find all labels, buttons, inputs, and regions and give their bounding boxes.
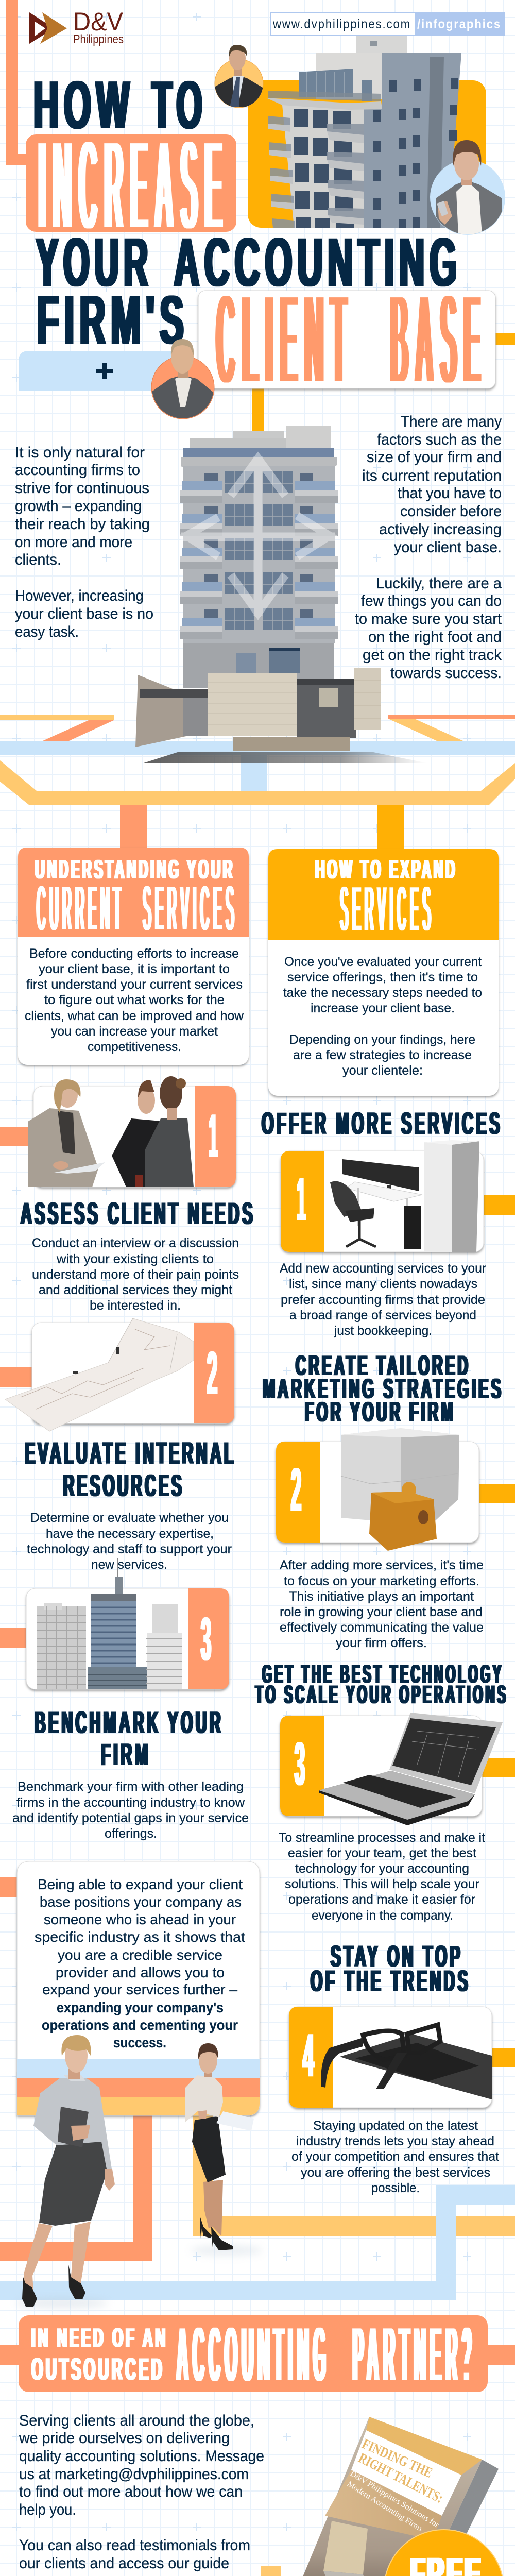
card: strategy 2 puzzle image (276, 1428, 515, 1551)
title: YOUR ACCOUNTING (36, 224, 462, 301)
intro text left: growth – expanding (15, 498, 142, 515)
text: contact invitation: You can also read testimonials from (19, 2537, 250, 2554)
text: create tailored marketing strategies: effectively communicating the value (280, 1620, 484, 1635)
text: evaluate internal resources: technology and staff to support your (27, 1542, 232, 1556)
intro text right: There are many (401, 413, 502, 430)
text: stay on top of the trends: industry trends lets you stay ahead (296, 2134, 494, 2148)
text: assess client needs: Conduct an interview or a discussion (32, 1236, 239, 1250)
text: evaluate internal resources: have the necessary expertise, (46, 1527, 214, 1541)
text: get the best technology (279, 1831, 485, 1923)
text: benchmark your firm: firms in the accounting industry to know (16, 1795, 245, 1810)
text: stay on top of the trends: Staying updated on the latest (313, 2119, 478, 2133)
icon: translucent expansion arrows over building (181, 456, 335, 616)
logo: D&V Philippines (29, 7, 124, 46)
intro text right: actively increasing (379, 521, 502, 538)
card: strategy 4 smart glasses image: 4 (303, 2021, 314, 2090)
text: benchmark your firm (12, 1780, 249, 1841)
text: get the best technology: everyone in the company. (312, 1908, 453, 1923)
heading: stay on top of the trends (311, 1940, 471, 1998)
text: assess client needs: and additional services they might (39, 1283, 232, 1297)
card: step 2 evaluate internal resources image: 2 (207, 1339, 217, 1408)
building backdrop panel (248, 80, 486, 228)
heading: benchmark your firm (35, 1705, 224, 1772)
intro text left (15, 444, 153, 640)
text: contact invitation: Serving clients all around the globe, (19, 2412, 254, 2429)
panel: closing statement: specific industry as it shows that (35, 1929, 245, 1945)
panel: how to expand services: your clientele: (342, 1063, 423, 1078)
text: assess client needs: understand more of their pain points (32, 1267, 239, 1282)
heading: create tailored marketing strategies (263, 1349, 504, 1428)
text: contact invitation: us at marketing@dvphilippines.com (19, 2466, 249, 2483)
card: strategy 4 smart glasses image (289, 2007, 515, 2108)
panel: understanding your current services: your client base, it is important to (39, 962, 230, 976)
heading: benchmark your firm: FIRM (101, 1737, 151, 1772)
intro text left: strive for continuous (15, 480, 149, 497)
text: TO (152, 67, 207, 143)
connector lines below building (0, 715, 515, 850)
text: evaluate internal resources (27, 1511, 232, 1572)
illustration: main building with stone podium (135, 426, 427, 763)
text: assess client needs: be interested in. (90, 1298, 181, 1313)
text: contact invitation: we pride ourselves on delivering (19, 2430, 230, 2447)
title: HOW TO: HOW (33, 67, 134, 143)
heading: evaluate internal resources (25, 1436, 236, 1503)
connector paths to call-to-action (0, 1877, 515, 2300)
text: contact invitation: quality accounting solutions. Message (19, 2448, 264, 2465)
panel: closing statement: expanding your company's (57, 1999, 224, 2015)
panel: closing statement: expand your services further – (42, 1981, 237, 1997)
intro text right: to make sure you start (355, 611, 502, 628)
call to action banner: OUTSOURCED (31, 2352, 165, 2386)
intro text left: easy task. (15, 623, 79, 640)
person: businesswoman holding tablet (15, 2035, 115, 2308)
person: businessman with tie (215, 45, 263, 108)
title: YOUR ACCOUNTING: YOUR (36, 224, 153, 301)
panel: closing statement: you are a credible service (58, 1947, 222, 1963)
text: get the best technology: solutions. This will help scale your (285, 1877, 479, 1891)
heading: get the best technology (255, 1659, 508, 1709)
panel: how to expand services (268, 849, 499, 1096)
card: step 1 assess client needs image (0, 1076, 236, 1187)
intro text right: consider before (400, 503, 502, 520)
text: evaluate internal resources: Determine or evaluate whether you (30, 1511, 229, 1525)
text: create tailored marketing strategies: to focus on your marketing efforts. (284, 1574, 479, 1588)
panel: understanding your current services: to figure out what works for the (44, 993, 225, 1007)
title: INCREASE in orange box (26, 111, 236, 259)
intro text left: clients. (15, 551, 61, 568)
text: create tailored marketing strategies: This initiative plays an important (289, 1589, 474, 1604)
illustration: filing cabinet, desk and chair (330, 1140, 479, 1252)
intro text left: on more and more (15, 534, 132, 551)
title: FIRM'S: FIRM'S (37, 282, 189, 359)
intro text right: your client base. (394, 539, 502, 556)
person: businesswoman holding papers (185, 2043, 263, 2256)
illustration: puzzle cube with gold piece (341, 1428, 459, 1551)
card: strategy 1 office desk image (281, 1140, 515, 1252)
panel: closing statement: success. (113, 2035, 166, 2050)
text: stay on top of the trends: of your competition and ensures that (291, 2149, 499, 2164)
connectors around client base box (252, 333, 515, 431)
card: strategy 3 laptop image: 3 (295, 1730, 305, 1798)
card: strategy 1 office desk image: 1 (297, 1165, 305, 1233)
panel: understanding your current services: Before conducting efforts to increase (29, 946, 239, 961)
illustration: printed chart paper (5, 1318, 194, 1431)
text: benchmark your firm: Benchmark your firm with other leading (18, 1780, 244, 1794)
person: smiling bald man (151, 339, 214, 420)
text: offer more services: prefer accounting firms that provide (281, 1293, 485, 1307)
text: create tailored marketing strategies: role in growing your client base and (280, 1605, 483, 1619)
card: step 2 evaluate internal resources image (0, 1318, 234, 1431)
website address bar (271, 12, 505, 36)
intro text left: However, increasing (15, 587, 144, 604)
illustration: whitepaper book: RIGHT TALENTS: (356, 2450, 445, 2506)
text: get the best technology: technology for your accounting (295, 1861, 469, 1876)
intro text right: that you have to (398, 485, 502, 502)
illustration: three office towers (37, 1558, 182, 1689)
panel: closing statement (17, 1861, 260, 2115)
card: step 3 benchmark image: 3 (201, 1605, 211, 1673)
illustration: whitepaper book: D&V Philippines Solutions for (349, 2469, 441, 2530)
panel: understanding your current services: clients, what can be improved and how (25, 1009, 244, 1023)
text: benchmark your firm: offerings. (105, 1826, 157, 1841)
illustration: whitepaper book (294, 2417, 499, 2576)
intro text left: their reach by taking (15, 516, 150, 533)
text: get the best technology: easier for your team, get the best (288, 1846, 476, 1860)
panel: understanding your current services: UNDERSTANDING YOUR (35, 855, 235, 885)
intro text right (355, 413, 502, 682)
intro text right: its current reputation (362, 467, 502, 484)
card: step 1 assess client needs image: 1 (209, 1101, 217, 1170)
text: offer more services: Add new accounting services to your (280, 1261, 486, 1276)
intro text right: towards success. (390, 665, 502, 682)
panel: understanding your current services: competitiveness. (88, 1040, 181, 1054)
text: create tailored marketing strategies: your firm offers. (336, 1636, 427, 1650)
header connector: orange L bar (6, 0, 26, 165)
text: offer more services: list, since many clients nowadays (289, 1277, 477, 1291)
panel: how to expand services: Once you've evaluated your current (284, 955, 482, 969)
text: benchmark your firm: and identify potential gaps in your service (12, 1811, 249, 1825)
intro text left: It is only natural for (15, 444, 145, 461)
text: stay on top of the trends: you are offering the best services (301, 2165, 490, 2180)
text: contact invitation: help you. (19, 2501, 76, 2518)
logo: D&V Philippines: D&V (73, 7, 124, 36)
panel: how to expand services: are a few strategies to increase (293, 1048, 472, 1062)
panel: closing statement: provider and allows you to (56, 1964, 225, 1980)
heading: benchmark your firm: BENCHMARK YOUR (35, 1705, 224, 1740)
intro text right: size of your firm and (367, 449, 502, 466)
logo: D&V Philippines: Philippines (73, 32, 124, 46)
card: strategy 3 laptop image (280, 1713, 515, 1825)
call to action banner: IN NEED OF AN (31, 2323, 168, 2353)
call to action banner (0, 2310, 515, 2399)
text: offer more services: a broad range of services beyond (289, 1308, 476, 1323)
people: three businesswomen talking (28, 1076, 194, 1187)
intro text right: get on the right track (363, 647, 502, 664)
illustration: open laptop (319, 1713, 503, 1825)
panel: how to expand services: take the necessary steps needed to (283, 986, 482, 1000)
text: assess client needs (32, 1236, 239, 1313)
text: create tailored marketing strategies (280, 1558, 484, 1650)
illustration: whitepaper book: FINDING THE (359, 2436, 435, 2481)
badge: free whitepaper (384, 2530, 504, 2576)
text: create tailored marketing strategies: After adding more services, it's time (280, 1558, 484, 1572)
text: CURRENT (37, 871, 125, 945)
panel: closing statement: someone who is ahead in your (44, 1911, 236, 1927)
panel: understanding your current services: first understand your current services (26, 977, 243, 992)
website address bar: www.dvphilippines.com (272, 17, 411, 31)
text: offer more services (280, 1261, 486, 1338)
panel: closing statement: operations and cementing your (42, 2017, 238, 2033)
card: step 3 benchmark image (0, 1558, 229, 1689)
text: contact invitation: to find out more about how we can (19, 2483, 243, 2500)
text: offer more services: just bookkeeping. (334, 1324, 432, 1338)
text: contact invitation (19, 2412, 264, 2576)
panel: how to expand services: service offerings, then it's time to (287, 970, 478, 985)
text: contact invitation: our clients and access our guide (19, 2555, 229, 2572)
accent: light blue plus panel (19, 351, 184, 391)
text: stay on top of the trends (291, 2119, 499, 2195)
text: evaluate internal resources: new services. (91, 1557, 167, 1572)
panel: understanding your current services (18, 848, 249, 1065)
intro text right: few things you can do (361, 592, 502, 609)
intro text right: Luckily, there are a (376, 575, 502, 592)
text: get the best technology: To streamline processes and make it (279, 1831, 485, 1845)
panel: how to expand services: Depending on your findings, here (289, 1032, 475, 1047)
illustration: glasses on keyboard (321, 2025, 492, 2099)
intro text left: your client base is no (15, 605, 153, 622)
bottom connector bands (0, 2566, 515, 2576)
card: strategy 2 puzzle image: 2 (291, 1455, 301, 1524)
intro text right: factors such as the (377, 431, 502, 448)
text: get the best technology: operations and make it easier for (288, 1892, 475, 1907)
intro text left: accounting firms to (15, 462, 140, 479)
panel: closing statement: Being able to expand your client (38, 1876, 243, 1892)
text: assess client needs: with your existing clients to (56, 1252, 214, 1266)
illustration: whitepaper book: Modern Accounting Firms (346, 2480, 424, 2533)
panel: how to expand services: increase your client base. (311, 1001, 455, 1015)
panel: closing statement: base positions your company as (40, 1894, 242, 1910)
intro text right: on the right foot and (368, 629, 502, 646)
panel: understanding your current services: you can increase your market (51, 1024, 218, 1039)
heading: evaluate internal resources: RESOURCES (63, 1468, 184, 1503)
person: businesswoman with phone (430, 140, 505, 237)
illustration: high-rise building top (266, 36, 461, 228)
text: stay on top of the trends: possible. (371, 2181, 420, 2195)
website address bar: /infographics (417, 17, 501, 31)
heading: evaluate internal resources: EVALUATE INTERNAL (25, 1436, 236, 1470)
heading: assess client needs: ASSESS CLIENT NEEDS (21, 1196, 255, 1231)
